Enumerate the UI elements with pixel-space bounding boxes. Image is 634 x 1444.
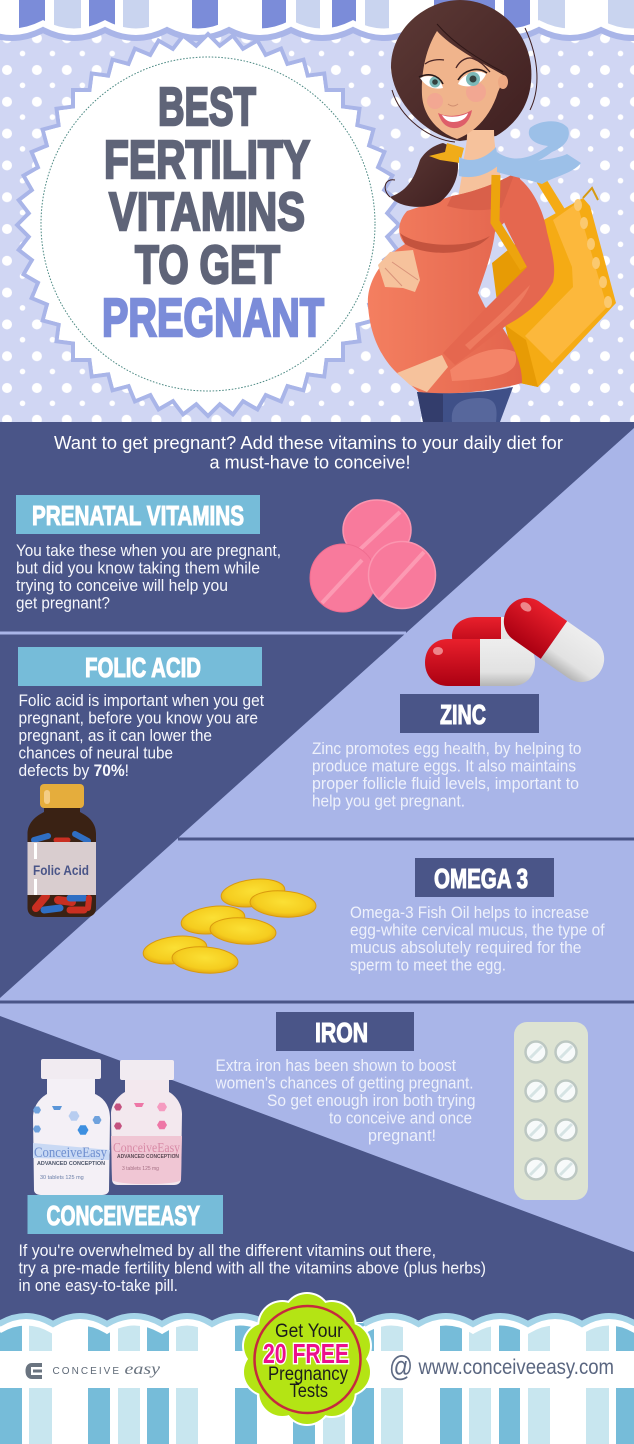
- starburst badge: [17, 34, 399, 416]
- icon: pink tablets: [310, 500, 436, 612]
- website address: @: [389, 1351, 413, 1383]
- text: conceiveeasy: in one easy-to-take pill.: [18, 1277, 178, 1295]
- callout: free pregnancy tests badge: [242, 1292, 372, 1426]
- logo: conceive easy: [26, 1361, 161, 1379]
- bang highlight: [437, 24, 503, 72]
- heading: iron: IRON: [315, 1017, 368, 1048]
- text: iron: pregnant!: [368, 1127, 436, 1145]
- lower pills: [36, 896, 89, 910]
- title: PREGNANT: [102, 288, 324, 348]
- bag strap front: [495, 175, 524, 268]
- icon: blue bottle: ConceiveEasy: [34, 1145, 107, 1161]
- text: iron: [215, 1057, 476, 1145]
- jeans: [417, 387, 513, 422]
- face: [422, 31, 505, 139]
- badge text: [263, 1321, 349, 1402]
- text: prenatal vitamins: but did you know taking them while: [16, 560, 260, 578]
- heading: zinc: ZINC: [440, 699, 486, 730]
- heading: iron: [276, 1012, 414, 1051]
- text: zinc: proper follicle fluid levels, important to: [312, 775, 579, 793]
- text: folic acid: defects by 70%!: [18, 762, 129, 780]
- title: [102, 77, 324, 348]
- text: folic acid: chances of neural tube: [18, 744, 173, 762]
- badge text: 20 FREE: [263, 1338, 349, 1369]
- heading: folic acid: FOLIC ACID: [85, 652, 201, 683]
- heading: prenatal vitamins: PRENATAL VITAMINS: [32, 500, 244, 531]
- icon: blister pack: [514, 1022, 588, 1200]
- footer stripes: [0, 1323, 634, 1444]
- footer banner: [0, 1316, 634, 1444]
- heading: folic acid: [18, 647, 262, 686]
- panel: iron: [215, 1012, 588, 1200]
- icon: folic acid bottle: Folic Acid: [33, 863, 89, 878]
- panel: folic acid: [18, 647, 264, 917]
- panel: omega 3: [142, 858, 605, 975]
- icon: pink bottle: 3 tablets 125 mg: [122, 1166, 159, 1172]
- bag strap back: [541, 180, 562, 214]
- title: BEST: [158, 77, 256, 137]
- icon: blue bottle: ADVANCED CONCEPTION: [37, 1161, 105, 1167]
- cheeks: [427, 93, 443, 109]
- text: iron: women's chances of getting pregnant.: [215, 1074, 474, 1092]
- text: zinc: [312, 740, 582, 810]
- intro text: [54, 432, 563, 472]
- heading: zinc: [400, 694, 539, 733]
- text: prenatal vitamins: trying to conceive will help you: [16, 577, 228, 595]
- text: omega 3: egg-white cervical mucus, the type of: [350, 922, 605, 940]
- text: omega 3: Omega-3 Fish Oil helps to increase: [350, 904, 589, 922]
- sweater sleeve: [443, 175, 554, 365]
- text: iron: So get enough iron both trying: [267, 1092, 476, 1110]
- icon: red and white capsules: [425, 589, 613, 691]
- badge text: Tests: [290, 1381, 328, 1402]
- text: zinc: help you get pregnant.: [312, 792, 465, 810]
- text: conceiveeasy: try a pre-made fertility blend with all the vitamins above (plus herbs): [18, 1260, 486, 1278]
- mouth: [438, 110, 472, 128]
- heading: conceiveeasy: [28, 1195, 223, 1234]
- text: zinc: Zinc promotes egg health, by helping to: [312, 740, 582, 758]
- badge shape: [242, 1292, 372, 1426]
- icon: folic acid bottle: [28, 784, 96, 917]
- icon: pink bottle: ADVANCED CONCEPTION: [117, 1154, 179, 1160]
- text: omega 3: sperm to meet the egg.: [350, 956, 506, 974]
- badge text: Pregnancy: [268, 1364, 348, 1385]
- icon: pink bottle: ConceiveEasy: [113, 1141, 180, 1156]
- panel: prenatal vitamins: [16, 495, 436, 612]
- upper pills: [34, 834, 88, 841]
- text: folic acid: pregnant, as it can lower the: [18, 727, 212, 745]
- awning stripes: [19, 0, 634, 30]
- icon: blue bottle: [33, 1059, 110, 1195]
- logo: conceive easy: easy: [124, 1361, 161, 1378]
- badge text: Get Your: [275, 1321, 344, 1342]
- title: VITAMINS: [109, 182, 305, 242]
- website address: [389, 1351, 614, 1383]
- icon: pink bottle: [111, 1060, 182, 1185]
- intro text: Want to get pregnant? Add these vitamins to your daily diet for: [54, 432, 563, 453]
- main background: [0, 422, 634, 1322]
- illustration: pregnant woman with bag: [368, 0, 616, 422]
- bag back panel: [492, 232, 540, 302]
- text: iron: to conceive and once: [329, 1110, 472, 1128]
- text: folic acid: pregnant, before you know you are: [18, 710, 258, 728]
- ponytail: [390, 143, 458, 207]
- hair back: [391, 0, 531, 141]
- text: conceiveeasy: If you're overwhelmed by all the different vitamins out there,: [18, 1242, 436, 1260]
- icon: fish oil softgels: [142, 876, 317, 975]
- bag: [505, 198, 616, 387]
- text: conceiveeasy: [18, 1242, 486, 1295]
- heading: omega 3: [415, 858, 554, 897]
- text: prenatal vitamins: [16, 542, 281, 612]
- text: folic acid: [18, 692, 264, 780]
- logo: conceive easy: CONCEIVE: [52, 1366, 119, 1377]
- text: folic acid: Folic acid is important when you get: [18, 692, 264, 710]
- text: zinc: produce mature eggs. It also maintains: [312, 758, 576, 776]
- text: omega 3: [350, 904, 605, 974]
- text: iron: Extra iron has been shown to boost: [216, 1057, 456, 1075]
- intro text: a must-have to conceive!: [210, 452, 410, 472]
- hands: [397, 355, 448, 392]
- sweater body: [368, 172, 528, 394]
- eyes: [419, 58, 490, 89]
- text: omega 3: mucus absolutely required for the: [350, 939, 582, 957]
- hero banner: [0, 0, 634, 422]
- heading: prenatal vitamins: [16, 495, 260, 534]
- panel: zinc: [312, 589, 613, 810]
- title: TO GET: [135, 235, 280, 295]
- neck: [458, 130, 500, 198]
- panel: conceiveeasy: [18, 1059, 486, 1295]
- text: prenatal vitamins: You take these when you are pregnant,: [16, 542, 281, 560]
- icon: blue bottle: 30 tablets 125 mg: [40, 1175, 84, 1181]
- title: FERTILITY: [104, 130, 310, 190]
- hair bow: [429, 143, 464, 163]
- heading: omega 3: OMEGA 3: [434, 863, 528, 894]
- heading: conceiveeasy: CONCEIVEEASY: [46, 1200, 200, 1231]
- website address: www.conceiveeasy.com: [418, 1356, 614, 1379]
- scarf: [459, 121, 581, 184]
- text: prenatal vitamins: get pregnant?: [16, 594, 110, 612]
